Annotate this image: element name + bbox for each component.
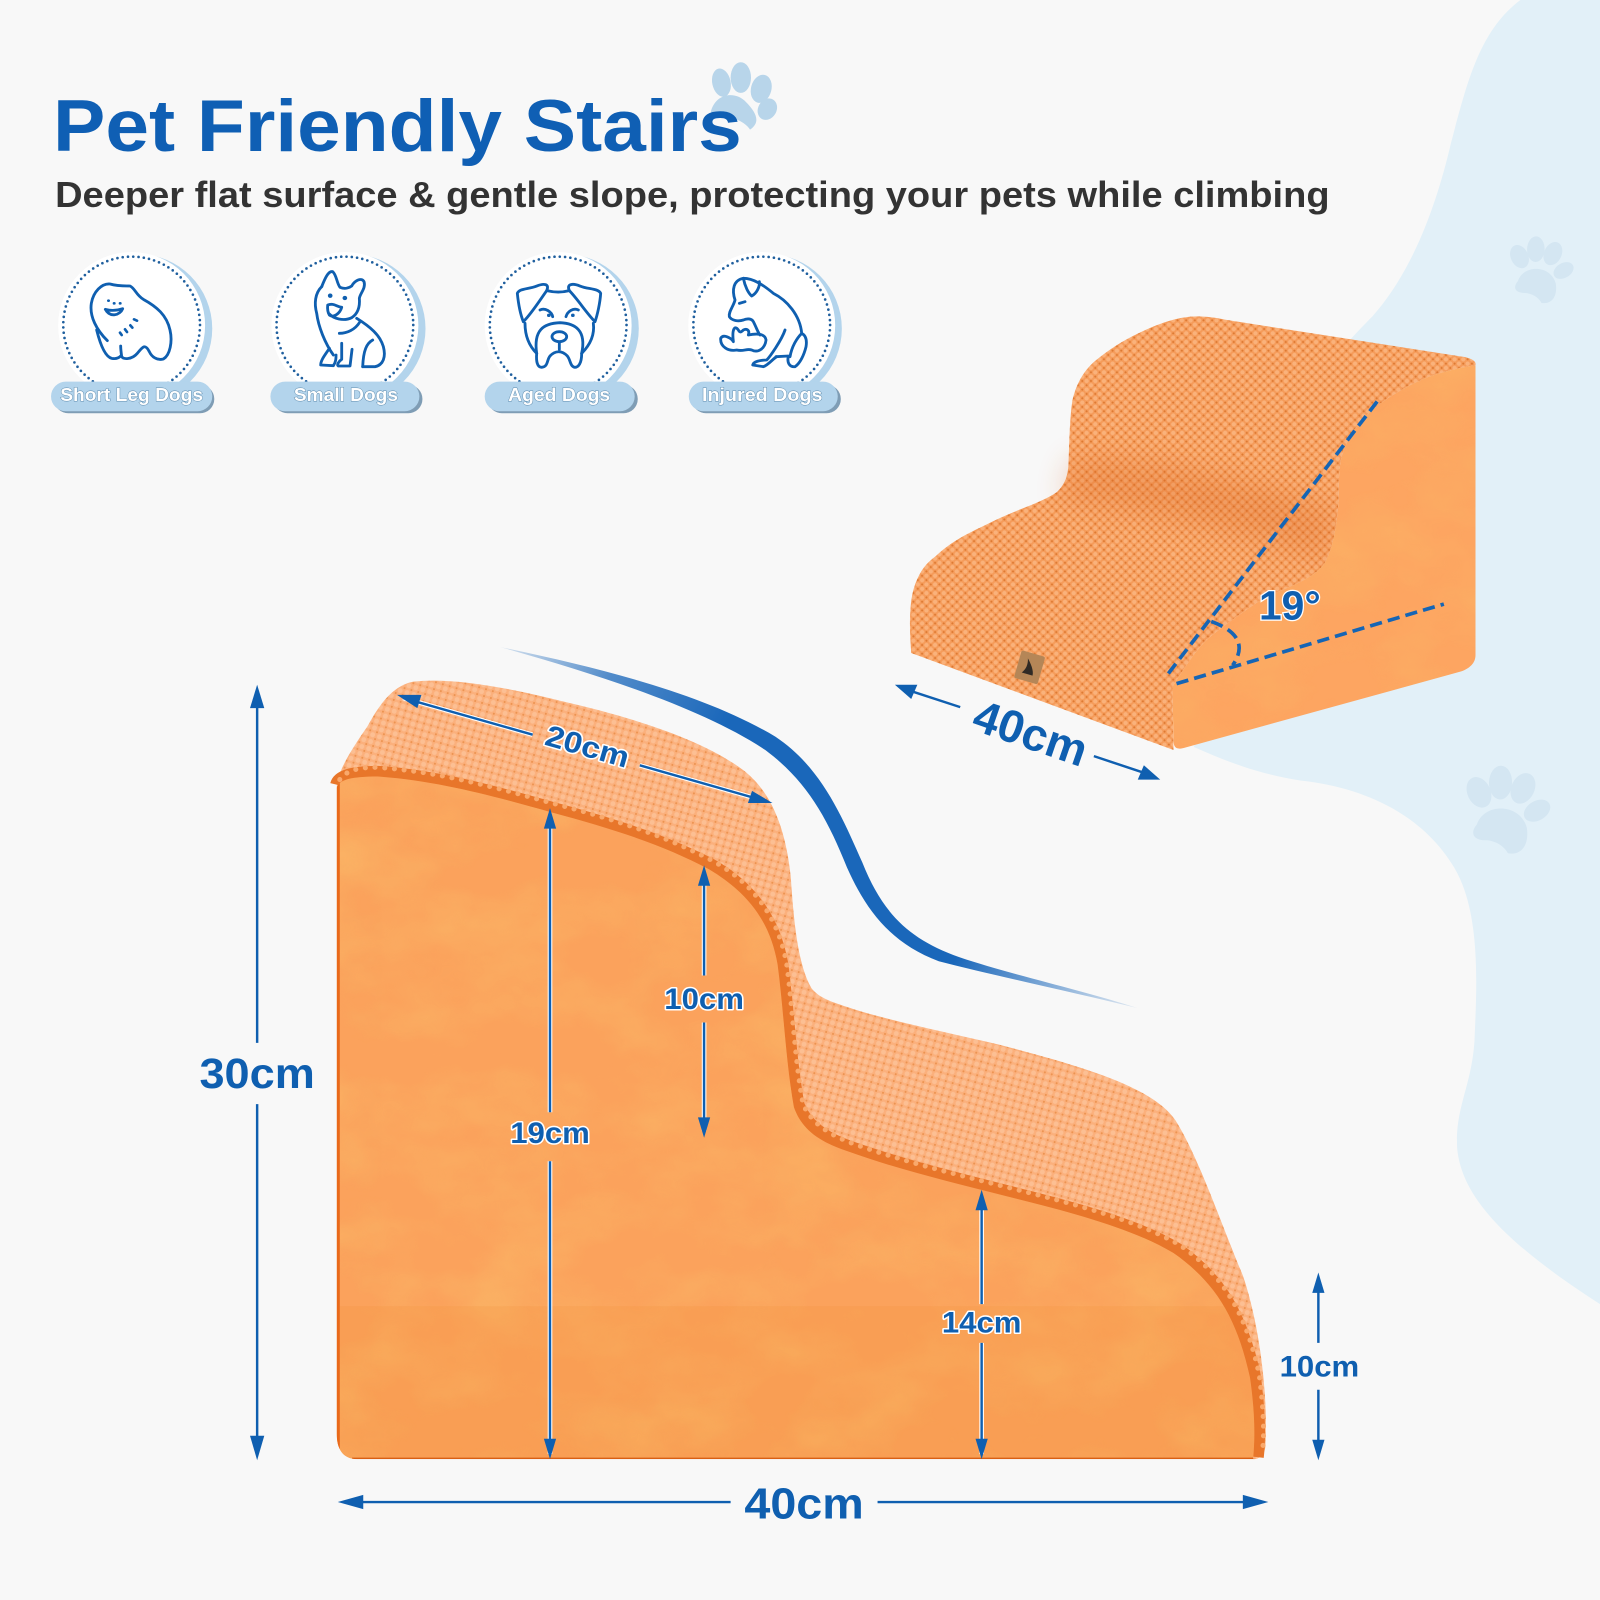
- title: Pet Friendly Stairs: [53, 84, 742, 167]
- badge: Short Leg Dogs: Short Leg Dogs: [60, 384, 203, 405]
- dimension: 10cm lower step: [1280, 1272, 1359, 1460]
- icon: paw print lower right: [1451, 758, 1561, 860]
- brand tag: [1014, 650, 1045, 684]
- dimension: 40cm width: [338, 1479, 1268, 1528]
- decorative blue blob: [1194, 0, 1600, 1304]
- badge: Small Dogs: [270, 252, 426, 413]
- slope line: [1168, 401, 1378, 673]
- dimension: 10cm step: 10cm: [664, 983, 744, 1016]
- base line: [1177, 604, 1444, 684]
- large stair side view: [327, 681, 1266, 1469]
- dimension: 14cm: 14cm: [942, 1307, 1021, 1340]
- badge: Injured Dogs: [688, 252, 842, 413]
- dimension: 10cm lower step: 10cm: [1280, 1351, 1359, 1384]
- badge: Aged Dogs: Aged Dogs: [508, 384, 610, 405]
- angle label: 19°: [1259, 582, 1321, 628]
- icon: bulldog: [517, 284, 601, 367]
- dimension: 10cm step: [664, 865, 744, 1138]
- velvet side: [1172, 365, 1476, 749]
- icon: pomeranian: [91, 284, 171, 359]
- icon: paw print upper right: [1498, 231, 1582, 308]
- icon: injured dog: [721, 278, 806, 367]
- badge: Aged Dogs: [485, 252, 639, 413]
- dimension: 30cm height: 30cm: [199, 1050, 315, 1098]
- badge: Short Leg Dogs: [51, 252, 214, 413]
- angle arc: [1211, 621, 1239, 665]
- dimension: 14cm: [942, 1190, 1021, 1459]
- width arrow right: [1094, 756, 1160, 780]
- icon: corgi: [315, 272, 384, 367]
- badge: Small Dogs: Small Dogs: [294, 384, 398, 405]
- badge: Injured Dogs: Injured Dogs: [702, 384, 822, 405]
- subtitle: Deeper flat surface & gentle slope, protecting your pets while climbing: [55, 175, 1330, 215]
- width arrow left: [895, 685, 960, 707]
- dimension: 20cm top: 20cm: [542, 719, 633, 775]
- mesh top surface: [910, 316, 1476, 750]
- dimension: 20cm top: [397, 695, 772, 803]
- dimension: 19cm: [510, 808, 590, 1459]
- width label: 40cm: [967, 689, 1095, 777]
- icon: title paw print: [709, 62, 781, 130]
- dimension: 40cm width: 40cm: [744, 1479, 864, 1528]
- dimension: 19cm: 19cm: [510, 1117, 590, 1150]
- mesh rim: [337, 767, 1264, 1457]
- mesh shading: [1061, 459, 1337, 561]
- dimension: 30cm height: [199, 685, 315, 1460]
- mesh top surface: [337, 681, 1266, 1459]
- small stair product view: [895, 316, 1490, 780]
- blue motion swoosh: [500, 647, 1138, 1008]
- velvet side: [327, 765, 1265, 1469]
